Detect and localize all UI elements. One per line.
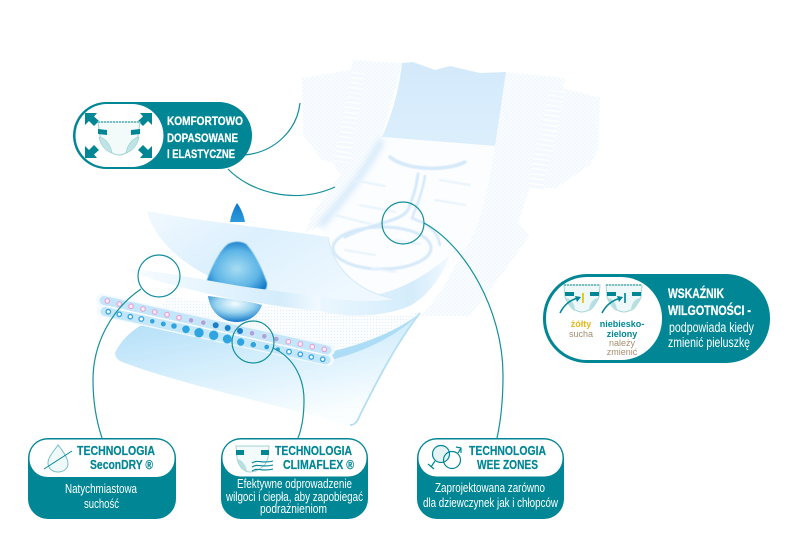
upper sheet edge [328,237,395,299]
panel: Climaflex [221,438,368,519]
description: Climaflex: wilgoci i ciepła, aby zapobiegać [225,490,363,504]
description: Climaflex [225,477,363,516]
description: Wee Zones: dla dziewczynek jak i chłopców [423,496,559,510]
description: SeconDRY [65,482,137,511]
heading: wetness indicator: WILGOTNOŚCI - [668,303,751,318]
heading: Climaflex [275,443,354,472]
diaper: back panel [382,62,506,146]
pad blue wedge [330,313,420,360]
circle: Climaflex [232,321,274,363]
indicator labels: zielony [607,329,637,339]
panel: Wee Zones [417,438,564,519]
icon: dry diaper [560,285,600,313]
icon: comfort diaper with arrows [85,113,152,158]
heading: wetness indicator: podpowiada kiedy [669,320,754,335]
panel: wetness indicator badge [543,274,770,363]
diaper: channels [333,157,470,272]
description: SeconDRY: suchość [84,497,119,511]
indicator labels: sucha [569,329,593,339]
upper sheet [147,211,395,301]
heading: comfort: DOPASOWANE [167,131,238,145]
panel: SeconDRY [28,438,176,519]
diaper: right ear stripes [527,88,566,190]
line: Wee Zones circle [424,223,503,438]
line: comfort top [245,103,300,155]
icon: gender symbols [428,446,461,469]
heading: wetness indicator: WSKAŹNIK [668,286,724,301]
panel: comfort badge [73,102,252,169]
heading: comfort: KOMFORTOWO [167,114,243,128]
circle: Wee Zones [382,202,424,244]
thin sheet behind drop [260,255,450,316]
indicator labels: należy [609,338,636,348]
indicator labels: niebiesko- [600,319,644,329]
heading: SeconDRY [77,443,155,472]
heading: wetness indicator: zmienić pieluszkę [668,335,750,350]
heading: Wee Zones [469,443,546,472]
description: Climaflex: Efektywne odprowadzenie [237,477,352,491]
indicator labels: zmienić [607,347,638,357]
diaper illustration [102,60,600,425]
heading: SeconDRY: TECHNOLOGIA [77,443,155,458]
description: Climaflex: podrażnieniom [260,502,327,516]
diaper: core [320,137,495,296]
line: SeconDRY circle [93,289,141,438]
icon: diaper with airflow [236,446,273,472]
description: Wee Zones [423,481,559,510]
pad right edge [350,313,420,425]
indicator labels [569,319,644,357]
icon: wet diaper [602,285,642,313]
heading: wetness indicator [668,286,754,350]
icon: droplet [44,445,72,472]
heading: Climaflex: CLIMAFLEX ® [283,457,354,472]
indicator labels: żółty [571,319,591,329]
diaper: left mesh wing [302,60,402,232]
heading: Climaflex: TECHNOLOGIA [275,443,352,458]
description: SeconDRY: Natychmiastowa [65,482,137,496]
diaper: right mesh wing [420,72,600,316]
beads band [102,299,329,361]
heading: Wee Zones: TECHNOLOGIA [469,443,546,458]
diaper: left ear stripes [333,72,364,165]
dotted absorbent layer [150,296,420,352]
large droplet lower [208,296,262,322]
circle: SeconDRY [138,255,180,297]
heading: comfort: I ELASTYCZNE [167,147,235,161]
lower pad [115,313,420,425]
line: comfort bottom [228,169,335,195]
connector lines [93,103,503,438]
thin sheet over droplet [122,268,320,311]
heading: SeconDRY: SeconDRY ® [90,457,153,472]
heading: Wee Zones: WEE ZONES [477,457,538,472]
falling droplet tip [230,203,245,222]
description: Wee Zones: Zaprojektowana zarówno [435,481,545,495]
large droplet upper [207,242,267,291]
line: Climaflex circle [273,348,304,438]
diaper: core soft edges [320,140,382,226]
heading: comfort [167,114,243,161]
